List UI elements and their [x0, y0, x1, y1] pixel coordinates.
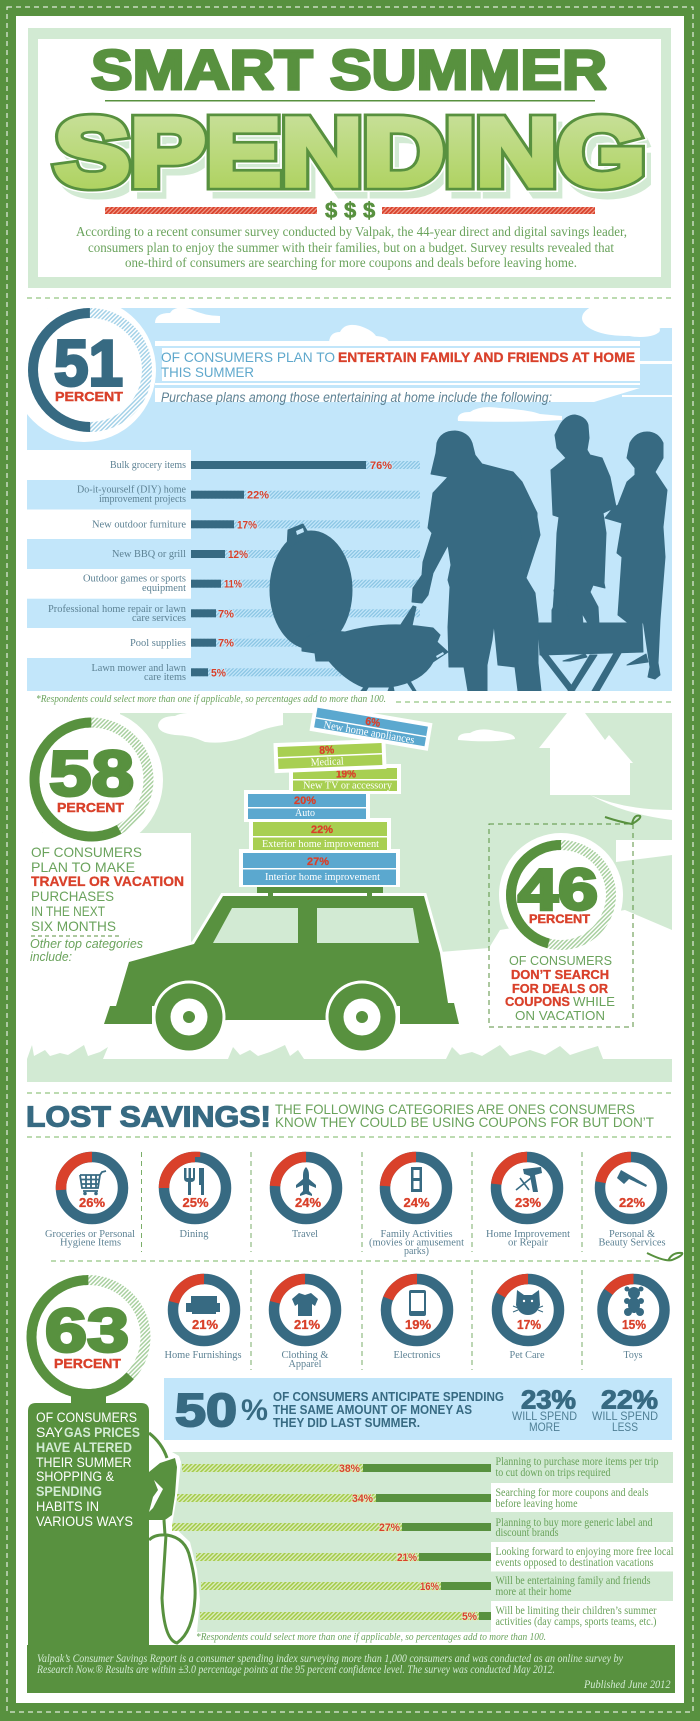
donut: personal and beauty 22%: Beauty Services [598, 1236, 666, 1248]
callout: 46 percent text [505, 953, 615, 1023]
bar labels: New outdoor furniture [92, 518, 186, 530]
divider with dollar signs [105, 198, 595, 223]
labels: Looking forward to enjoying more free local [496, 1546, 674, 1558]
bar labels [48, 459, 186, 683]
house [539, 713, 633, 795]
labels: events opposed to destination vacations [496, 1557, 654, 1569]
wheels [152, 980, 400, 1054]
callout: 46 percent text: OF CONSUMERS [509, 953, 612, 968]
values [339, 1463, 477, 1623]
donut: home furnishings 21% [164, 1272, 242, 1361]
suitcase: medical: Medical [311, 755, 344, 769]
heading: lost savings: THE FOLLOWING CATEGORIES ARE ONES CONSUMERS [275, 1101, 635, 1117]
bar values: 7% [218, 608, 234, 620]
panel: gas prices: HAVE ALTERED [36, 1440, 132, 1455]
donut: groceries 26% [45, 1155, 135, 1248]
icon: t-shirt [292, 1293, 318, 1316]
callout: 46 percent text: FOR DEALS OR [512, 981, 609, 996]
donut: personal and beauty 22% [595, 1152, 667, 1248]
bar values [211, 460, 392, 679]
panel: 50 percent: LESS [612, 1420, 638, 1434]
ring: 58 percent [14, 702, 169, 857]
stat: 51 percent: PERCENT [55, 389, 123, 404]
callout: 46 percent text: ON VACATION [515, 1008, 605, 1023]
father [412, 431, 541, 691]
stat: 58 percent: PERCENT [57, 800, 124, 815]
donut: clothing and apparel 21% [267, 1272, 343, 1370]
suitcase: interior home improvement [239, 849, 400, 887]
text: travel or vacation: OF CONSUMERS [31, 844, 142, 860]
suitcase: new tv: New TV or accessory [303, 780, 392, 792]
panel: gas prices: SHOPPING & [36, 1469, 114, 1484]
panel: 50 percent: THEY DID LAST SUMMER. [273, 1416, 420, 1430]
icon: teddy bear [624, 1286, 644, 1316]
intro text: consumers plan to enjoy the summer with their families, but on a budget. Survey results revealed that [88, 241, 614, 256]
panel: gas prices: VARIOUS WAYS [36, 1514, 133, 1529]
panel: gas prices [28, 1403, 149, 1645]
suitcase: exterior home improvement: 22% [311, 824, 333, 836]
illustration: family at the grill [270, 415, 667, 691]
panel: gas prices: THEIR SUMMER [36, 1455, 132, 1470]
panel: 50 percent: OF CONSUMERS ANTICIPATE SPENDING [273, 1390, 504, 1404]
panel: 50 percent: 23% [521, 1386, 576, 1414]
panel: gas prices: OF CONSUMERS [36, 1410, 137, 1425]
suitcase: new home appliances [309, 703, 433, 751]
donut: family activities 24%: parks) [404, 1245, 429, 1257]
callout: 46 percent text: WHILE [573, 994, 615, 1009]
donut: home improvement 23%: or Repair [508, 1236, 548, 1248]
panel: 50 percent: 22% [601, 1386, 658, 1414]
ribbon [647, 1253, 682, 1261]
donut: home improvement 23% [486, 1153, 570, 1248]
ring: 46 percent [500, 834, 622, 956]
bar labels: equipment [142, 582, 186, 594]
icon: brush [617, 1170, 647, 1187]
footer: Research Now.® Results are within ±3.0 percentage points at the 95 percent confidence level. The survey was conducted May 2012. [36, 1662, 555, 1676]
donut: clothing and apparel 21%: Apparel [288, 1358, 322, 1370]
text: travel or vacation: include: [30, 949, 72, 964]
road [590, 795, 672, 820]
donut: family activities 24%: (movies or amusement [369, 1236, 464, 1248]
title: Smart Summer: SMART SUMMER [91, 38, 607, 101]
subheading: Purchase plans among those entertaining at home include the following: [161, 390, 552, 405]
values: 38% [339, 1463, 360, 1475]
donut: personal and beauty 22%: Personal & [609, 1228, 655, 1240]
bar labels: Do-it-yourself (DIY) home [77, 484, 186, 496]
donut: clothing and apparel 21%: 21% [294, 1318, 320, 1332]
donut: dining 25%: 25% [182, 1196, 208, 1210]
values: 34% [352, 1493, 373, 1505]
icon: hammer and wrench [523, 1167, 542, 1192]
panel: 50 percent: WILL SPEND [512, 1409, 577, 1423]
suitcase: auto: 20% [294, 795, 316, 807]
suitcase: exterior home improvement: Exterior home improvement [262, 838, 379, 850]
footer: Published June 2012 [583, 1677, 670, 1691]
table [538, 623, 643, 655]
bar labels: New BBQ or grill [112, 548, 186, 560]
labels: before leaving home [496, 1498, 578, 1510]
intro text: one-third of consumers are searching for more coupons and deals before leaving home. [125, 256, 577, 271]
bar labels: Lawn mower and lawn [92, 662, 186, 674]
donut: home furnishings 21%: Home Furnishings [164, 1349, 242, 1361]
heading: entertain family [161, 349, 635, 380]
bar values: 17% [237, 519, 257, 531]
woman [551, 415, 616, 625]
donut: home improvement 23%: Home Improvement [486, 1228, 570, 1240]
stat: 46 percent: PERCENT [529, 912, 591, 926]
footer [27, 1645, 675, 1693]
stat: 51 percent: 51 [54, 326, 123, 400]
dashed callout box with ribbon [489, 816, 640, 1027]
bar values: 5% [211, 667, 226, 679]
suitcase: new tv [289, 764, 401, 794]
callout: 46 percent text: DON’T SEARCH [511, 967, 609, 982]
donut: electronics 19% [377, 1270, 457, 1361]
text: travel or vacation: IN THE NEXT [31, 903, 105, 919]
labels: discount brands [496, 1527, 559, 1539]
donut: family activities 24%: Family Activities [380, 1228, 452, 1240]
bar values: 22% [247, 490, 269, 502]
white circle behind 46 [499, 833, 623, 957]
callout: 46 percent text: COUPONS [505, 994, 570, 1009]
donut: toys 15%: Toys [624, 1349, 642, 1361]
bar values: 76% [370, 460, 392, 472]
donut: dining 25%: Dining [180, 1228, 209, 1240]
white header bands [155, 341, 672, 402]
clouds [155, 300, 672, 422]
donut: groceries 26%: Groceries or Personal [45, 1228, 135, 1240]
panel: gas prices: SAY [36, 1425, 63, 1440]
bar values: 7% [218, 638, 234, 650]
panel: gas prices: GAS PRICES [64, 1425, 140, 1440]
heading: lost savings [26, 1101, 654, 1133]
panel: 50 percent [164, 1378, 672, 1440]
bar values: 11% [224, 579, 242, 591]
donut: electronics 19%: 19% [405, 1318, 431, 1332]
suitcase: new home appliances: 6% [364, 716, 381, 730]
panel: gas prices: SPENDING [36, 1484, 102, 1499]
suitcase: new tv: 19% [336, 768, 356, 780]
bar labels: Pool supplies [130, 637, 186, 649]
title: Spending: SPENDING [60, 107, 652, 214]
icon: cat [516, 1290, 540, 1315]
stat: 63 percent: PERCENT [54, 1356, 121, 1371]
donut: groceries 26%: 26% [79, 1196, 105, 1210]
labels: to cut down on trips required [496, 1467, 611, 1479]
heading: entertain family: OF CONSUMERS PLAN TO [161, 349, 335, 365]
icon: smartphone [409, 1290, 426, 1316]
suitcase: interior home improvement: 27% [307, 856, 329, 868]
white circle behind 58 [19, 708, 163, 852]
bar labels: improvement projects [99, 493, 186, 505]
suitcase: exterior home improvement [249, 818, 391, 851]
text: travel or vacation: PURCHASES [31, 888, 114, 904]
title: Spending: SPENDING [54, 99, 646, 206]
labels: activities (day camps, sports teams, etc.) [496, 1616, 657, 1628]
panel: entertain at home [12, 298, 672, 691]
stat: 63 percent: 63 [45, 1296, 129, 1364]
luggage stack [239, 703, 433, 887]
donut: toys 15% [590, 1267, 677, 1361]
grid dividers [142, 1152, 582, 1370]
labels: Will be limiting their children’s summer [496, 1605, 657, 1617]
heading: lost savings: KNOW THEY COULD BE USING COUPONS FOR BUT DON’T [275, 1114, 654, 1130]
intro text [76, 225, 627, 271]
boy [605, 432, 667, 679]
text: travel or vacation: Other top categories [30, 936, 143, 951]
donut: personal and beauty 22%: 22% [619, 1196, 645, 1210]
donut: family activities 24% [369, 1155, 464, 1257]
panel: 50 percent: MORE [529, 1420, 560, 1434]
heading: entertain family: ENTERTAIN FAMILY AND FRIENDS AT HOME [338, 349, 635, 365]
suitcase: interior home improvement: Interior home improvement [265, 871, 380, 883]
bar labels: Bulk grocery items [110, 459, 186, 471]
ring: 63 percent [8, 1256, 169, 1418]
stat: 46 percent: 46 [518, 858, 598, 922]
footnote: *Respondents could select more than one if applicable, so percentages add to more than 100. [36, 693, 386, 705]
white circle behind 51 [27, 308, 156, 442]
labels: Planning to buy more generic label and [496, 1517, 653, 1529]
labels: Will be entertaining family and friends [496, 1575, 651, 1587]
icon: gas nozzle and hose [149, 1433, 195, 1643]
divider with dollar signs: $$$ [325, 198, 375, 223]
title: Spending: SPENDING [54, 99, 646, 206]
heading: entertain family: THIS SUMMER [161, 364, 254, 380]
bar chart: gas price changes [172, 1452, 674, 1632]
labels: Planning to purchase more items per trip [496, 1456, 659, 1468]
title: Spending: SPENDING [54, 99, 646, 206]
labels: more at their home [496, 1586, 572, 1598]
donut: clothing and apparel 21%: Clothing & [282, 1349, 329, 1361]
values: 27% [379, 1522, 400, 1534]
labels [496, 1456, 674, 1628]
suitcase: auto: Auto [295, 807, 315, 819]
bar chart: purchase plans [27, 450, 420, 683]
suitcase: medical [273, 739, 387, 773]
panel: 50 percent: 50 [175, 1384, 237, 1436]
bar labels: care items [144, 671, 186, 683]
illustration: car [104, 887, 459, 1054]
bar values: 12% [228, 549, 248, 561]
text: travel or vacation: PLAN TO MAKE [31, 859, 135, 875]
panel: travel or vacation [14, 702, 672, 1082]
values: 5% [462, 1611, 477, 1623]
panel: 50 percent: THE SAME AMOUNT OF MONEY AS [273, 1403, 472, 1417]
suitcase: auto [244, 790, 370, 822]
icon: fork and knife [184, 1168, 204, 1195]
icon: cart [80, 1171, 106, 1191]
grass [27, 1045, 672, 1082]
panel: 50 percent: WILL SPEND [592, 1409, 658, 1423]
donut: groceries 26%: Hygiene Items [60, 1236, 121, 1248]
suitcase: medical: 8% [319, 744, 335, 757]
suitcase: new home appliances: New home appliances [323, 719, 415, 746]
values: 16% [420, 1581, 439, 1593]
donut: pet care 17%: 17% [517, 1318, 541, 1332]
bar labels: Outdoor games or sports [83, 572, 186, 584]
panel: 50 percent: % [241, 1394, 268, 1427]
panel: title header [28, 28, 671, 288]
donut: toys 15%: 15% [622, 1318, 646, 1332]
icon: film strip [411, 1167, 422, 1192]
values: 21% [397, 1552, 417, 1564]
donut: dining 25% [164, 1157, 226, 1240]
donut: pet care 17%: Pet Care [510, 1349, 545, 1361]
donut: electronics 19%: Electronics [394, 1349, 440, 1361]
cloud [158, 713, 283, 743]
grill [270, 524, 448, 691]
text: travel or vacation: TRAVEL OR VACATION [31, 873, 184, 889]
text: travel or vacation [30, 844, 184, 964]
footnote: *Respondents could select more than one if applicable, so percentages add to more than 100. [196, 1631, 546, 1643]
donut: pet care 17% [486, 1268, 570, 1361]
donut: family activities 24%: 24% [404, 1196, 430, 1210]
bar labels: care services [132, 612, 186, 624]
donut: home improvement 23%: 23% [515, 1196, 541, 1210]
ground [27, 910, 672, 1059]
heading: lost savings: LOST SAVINGS! [26, 1101, 271, 1133]
stat: 58 percent: 58 [49, 738, 134, 810]
donut: home furnishings 21%: 21% [192, 1318, 218, 1332]
intro text: According to a recent consumer survey conducted by Valpak, the 44-year direct and digital savings leader, [76, 225, 627, 240]
donut: travel 24%: Travel [292, 1228, 318, 1240]
labels: Searching for more coupons and deals [496, 1487, 649, 1499]
ring: 51 percent [33, 313, 147, 427]
donut: travel 24% [273, 1155, 339, 1240]
donut: travel 24%: 24% [295, 1196, 321, 1210]
bar labels: Professional home repair or lawn [48, 603, 186, 615]
panel: gas prices: HABITS IN [36, 1499, 99, 1514]
text: travel or vacation: SIX MONTHS [31, 918, 116, 934]
icon: sofa [186, 1296, 220, 1314]
icon: airplane [296, 1167, 316, 1196]
